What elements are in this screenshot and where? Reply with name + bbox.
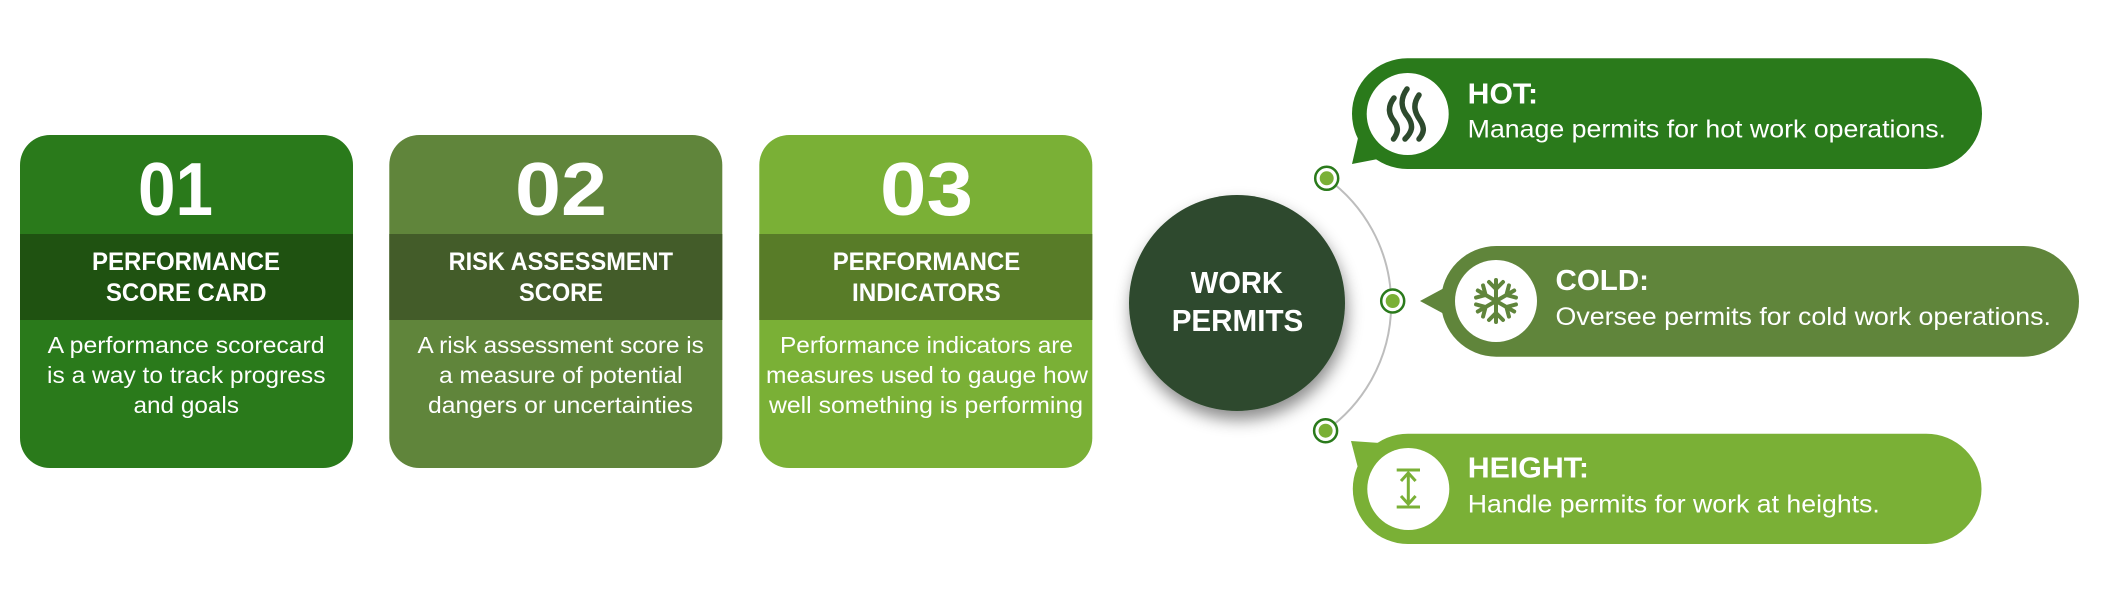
callout: cold: Oversee permits for cold work operations.: [1556, 303, 2051, 331]
heading: performance indicators: INDICATORS: [852, 279, 1001, 307]
heading: performance indicators: PERFORMANCE: [833, 248, 1020, 276]
description: card 02: dangers or uncertainties: [428, 392, 693, 418]
number 01: 01: [138, 147, 213, 231]
header band: card 01: [20, 234, 353, 320]
icon: height arrows: [1397, 470, 1420, 507]
description: card 01: and goals: [134, 392, 239, 418]
description: card 02: a measure of potential: [439, 362, 682, 388]
central circle: work permits: WORK: [1191, 265, 1284, 300]
heading: performance score card: SCORE CARD: [106, 279, 266, 307]
icon: snowflake: [1474, 280, 1518, 322]
heading: risk assessment score: [449, 248, 673, 307]
description: card 02: [418, 332, 704, 418]
central circle: work permits: PERMITS: [1172, 303, 1303, 338]
description: card 03: Performance indicators are: [780, 332, 1073, 358]
description: card 01: A performance scorecard: [48, 332, 325, 358]
heading: performance score card: PERFORMANCE: [92, 248, 280, 276]
callout: height: Handle permits for work at heights.: [1468, 491, 1880, 519]
number 03: 03: [880, 147, 973, 231]
central circle: work permits: [1129, 195, 1345, 411]
heading: risk assessment score: RISK ASSESSMENT: [449, 248, 673, 276]
callout: hot: Manage permits for hot work operations.: [1468, 116, 1946, 144]
number 02: 02: [515, 147, 607, 231]
description: card 01: is a way to track progress: [47, 362, 326, 388]
heading: risk assessment score: SCORE: [519, 279, 603, 307]
node: height: [1314, 419, 1337, 442]
description: card 03: [766, 332, 1088, 418]
callout: height: [1351, 434, 1982, 544]
callout: hot: [1352, 58, 1982, 169]
panel: card 03 performance indicators: [759, 135, 1092, 468]
header band: card 02: [389, 234, 722, 320]
node: cold: [1381, 290, 1404, 312]
callout: cold: [1420, 246, 2079, 357]
description: card 03: measures used to gauge how: [766, 362, 1088, 388]
callout: cold: COLD:: [1556, 265, 1649, 297]
heading: performance indicators: [833, 248, 1020, 307]
node: hot: [1315, 167, 1338, 190]
panel: card 01 performance score card: [20, 135, 353, 468]
heading: performance score card: [92, 248, 280, 307]
icon: heat waves: [1389, 89, 1423, 139]
panel: card 02 risk assessment score: [389, 135, 722, 468]
callout: height: HEIGHT:: [1468, 453, 1589, 485]
connector arc: [1326, 178, 1391, 431]
description: card 02: A risk assessment score is: [418, 332, 704, 358]
description: card 01: [47, 332, 326, 418]
description: card 03: well something is performing: [768, 392, 1083, 418]
callout: hot: HOT:: [1468, 78, 1538, 110]
header band: card 03: [759, 234, 1092, 320]
